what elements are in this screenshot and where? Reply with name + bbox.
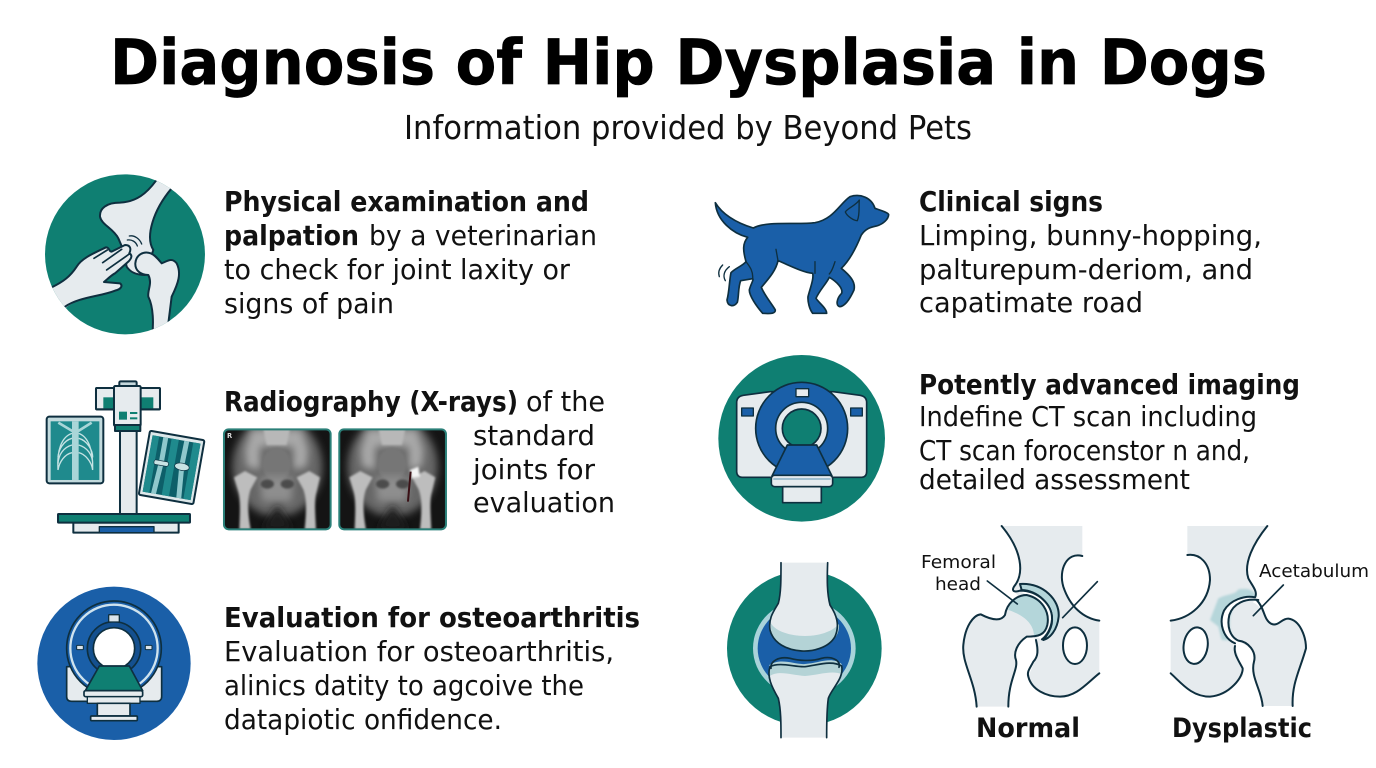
leg x-ray film [139, 431, 205, 504]
text: clinical signs [919, 185, 1262, 319]
icon: MRI scanner on blue circle [37, 587, 191, 740]
chest x-ray film [47, 417, 103, 483]
text: evaluation for osteoarthritis: Evaluation for osteoarthritis, [224, 635, 614, 668]
diagram: normal hip [963, 526, 1099, 707]
icon: CT scanner on teal circle [718, 355, 885, 522]
label: acetabulum: Acetabulum [1259, 561, 1369, 582]
x-ray photo: hips with implant [338, 428, 447, 530]
text: radiography: evaluation [473, 486, 615, 519]
label: normal: Normal [976, 713, 1080, 744]
text: evaluation for osteoarthritis: Evaluation for osteoarthritis [224, 601, 640, 634]
text: radiography [224, 385, 615, 519]
text: radiography: Radiography (X-rays) [224, 385, 518, 418]
text: advanced imaging: CT scan forocenstor n and, [919, 434, 1250, 467]
icon: hand palpating hip joint [43, 173, 205, 340]
subtitle: Information provided by Beyond Pets [404, 108, 972, 147]
text: radiography: standard [473, 419, 595, 452]
text: clinical signs: palturepum-deriom, and [919, 253, 1253, 286]
text: evaluation for osteoarthritis [224, 601, 640, 736]
text: advanced imaging: Potently advanced imaging [919, 368, 1300, 401]
acetabular cup [1020, 584, 1059, 640]
label: femoral head: Femoral [921, 552, 996, 573]
text: physical examination: by a veterinarian [369, 219, 597, 252]
text: physical examination: to check for joint laxity or [224, 253, 570, 286]
text: advanced imaging: Indefine CT scan including [919, 400, 1257, 433]
text: physical examination: palpation [224, 219, 359, 252]
title: Diagnosis of Hip Dysplasia in Dogs [110, 26, 1267, 99]
text: evaluation for osteoarthritis: alinics datity to agcoive the [224, 669, 584, 702]
text: clinical signs: capatimate road [919, 286, 1143, 319]
text: radiography: of the [526, 385, 605, 418]
diagram: dysplastic hip [1171, 526, 1306, 706]
text: clinical signs: Clinical signs [919, 185, 1103, 218]
text: physical examination: signs of pain [224, 287, 394, 320]
label: femoral head: head [935, 574, 981, 595]
text: clinical signs: Limping, bunny-hopping, [919, 219, 1262, 252]
text: radiography: joints for [472, 453, 595, 486]
text: physical examination [224, 185, 597, 320]
icon: knee joint on teal circle [727, 563, 882, 738]
text: advanced imaging [919, 368, 1300, 496]
icon: limping dog [715, 196, 889, 314]
text: evaluation for osteoarthritis: datapiotic onfidence. [224, 703, 502, 736]
x-ray photo: normal hips [222, 428, 332, 530]
icon: x-ray machine [47, 381, 205, 533]
label: femoral head [921, 552, 996, 595]
text: physical examination: Physical examination and [224, 185, 589, 218]
x-ray photo: normal hips: R [227, 432, 232, 440]
femoral head cartilage [1008, 595, 1048, 636]
text: advanced imaging: detailed assessment [919, 463, 1190, 496]
label: dysplastic: Dysplastic [1172, 713, 1312, 744]
